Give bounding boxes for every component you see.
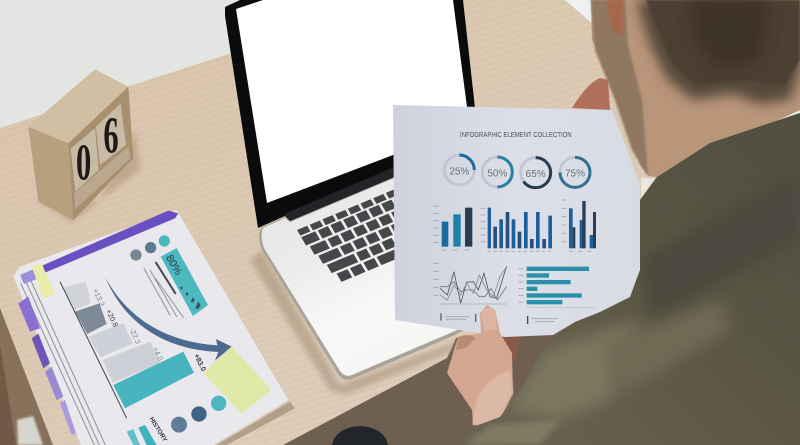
keyboard bbox=[297, 183, 442, 287]
document shadow bbox=[217, 402, 295, 445]
donut 75% bbox=[560, 157, 590, 187]
calendar side face bbox=[28, 127, 73, 220]
stepped bar chart: +13.3 bbox=[91, 287, 107, 308]
calendar front frame bbox=[68, 87, 133, 220]
calendar base bar bbox=[74, 147, 131, 209]
olive shirt bbox=[460, 113, 800, 445]
date tile 0: 0 bbox=[76, 134, 91, 191]
donut 75%: 75% bbox=[565, 169, 585, 180]
laptop screen bezel bbox=[225, 0, 475, 228]
lower sheets and page edges bbox=[13, 210, 288, 445]
donut 65% bbox=[521, 158, 551, 188]
purple highlighter band bbox=[20, 211, 178, 284]
under-desk floor and desk leg bbox=[0, 308, 610, 445]
bottom icon circles bbox=[171, 396, 226, 433]
purple divider tabs bbox=[18, 297, 76, 435]
bottom history label bbox=[127, 416, 169, 445]
sheet title: INFOGRAPHIC ELEMENT COLLECTION bbox=[460, 130, 572, 139]
hand behind the top of the paper bbox=[572, 78, 610, 110]
stepped bar chart: +83.0 bbox=[192, 352, 208, 373]
dark object at lower edge bbox=[332, 426, 388, 445]
bar chart: three bars bbox=[433, 206, 472, 250]
sheet paper bbox=[393, 105, 640, 337]
gap of background by the collar bbox=[641, 178, 655, 198]
green sticky note bbox=[203, 347, 272, 413]
date tile 6: 6 bbox=[103, 108, 119, 165]
calendar top face bbox=[28, 69, 128, 143]
neck and side of face bbox=[591, 0, 800, 177]
donut 50% bbox=[482, 157, 512, 187]
stepped bar chart: +4.0 bbox=[151, 345, 165, 362]
donut 50%: 50% bbox=[487, 168, 507, 179]
bar chart: eleven bars bbox=[481, 208, 552, 251]
laptop white screen bbox=[236, 0, 467, 203]
stat text lines bbox=[144, 263, 183, 317]
donut 65%: 65% bbox=[526, 169, 546, 180]
calendar shadow bbox=[38, 130, 140, 222]
hair bbox=[636, 0, 800, 104]
hand holding the sheet bbox=[447, 305, 513, 425]
bar chart: paired bars bbox=[562, 200, 596, 251]
line chart bbox=[433, 263, 507, 304]
chart legends bbox=[440, 313, 558, 324]
laptop bbox=[225, 0, 520, 380]
wooden block calendar bbox=[28, 69, 133, 220]
donut 25%: 25% bbox=[449, 166, 469, 177]
laptop base bbox=[259, 150, 520, 380]
horizontal bar chart bbox=[518, 267, 595, 307]
yellow page flag bbox=[32, 263, 55, 298]
date tile 6 bbox=[96, 103, 126, 165]
curved arrow bbox=[105, 277, 232, 361]
date tile 0 bbox=[71, 128, 99, 192]
top icon circles bbox=[130, 235, 170, 261]
stepped bar chart: +20.8 bbox=[104, 308, 120, 328]
laptop shadow on desk bbox=[250, 250, 460, 395]
shirt sleeve highlight bbox=[505, 320, 640, 420]
fingers behind the paper bbox=[498, 330, 520, 365]
stepped bar chart bbox=[60, 282, 208, 418]
teal stat card: 80% bbox=[163, 253, 184, 278]
bottom history label: HISTORY bbox=[148, 416, 169, 444]
donut 25% bbox=[444, 155, 474, 185]
held infographic sheet bbox=[393, 105, 640, 337]
stack of documents on the desk bbox=[13, 210, 295, 445]
teal stat card bbox=[161, 248, 208, 316]
laptop hinge bbox=[284, 125, 475, 221]
stepped bar chart: -22.3 bbox=[128, 326, 143, 345]
man bbox=[460, 0, 800, 445]
